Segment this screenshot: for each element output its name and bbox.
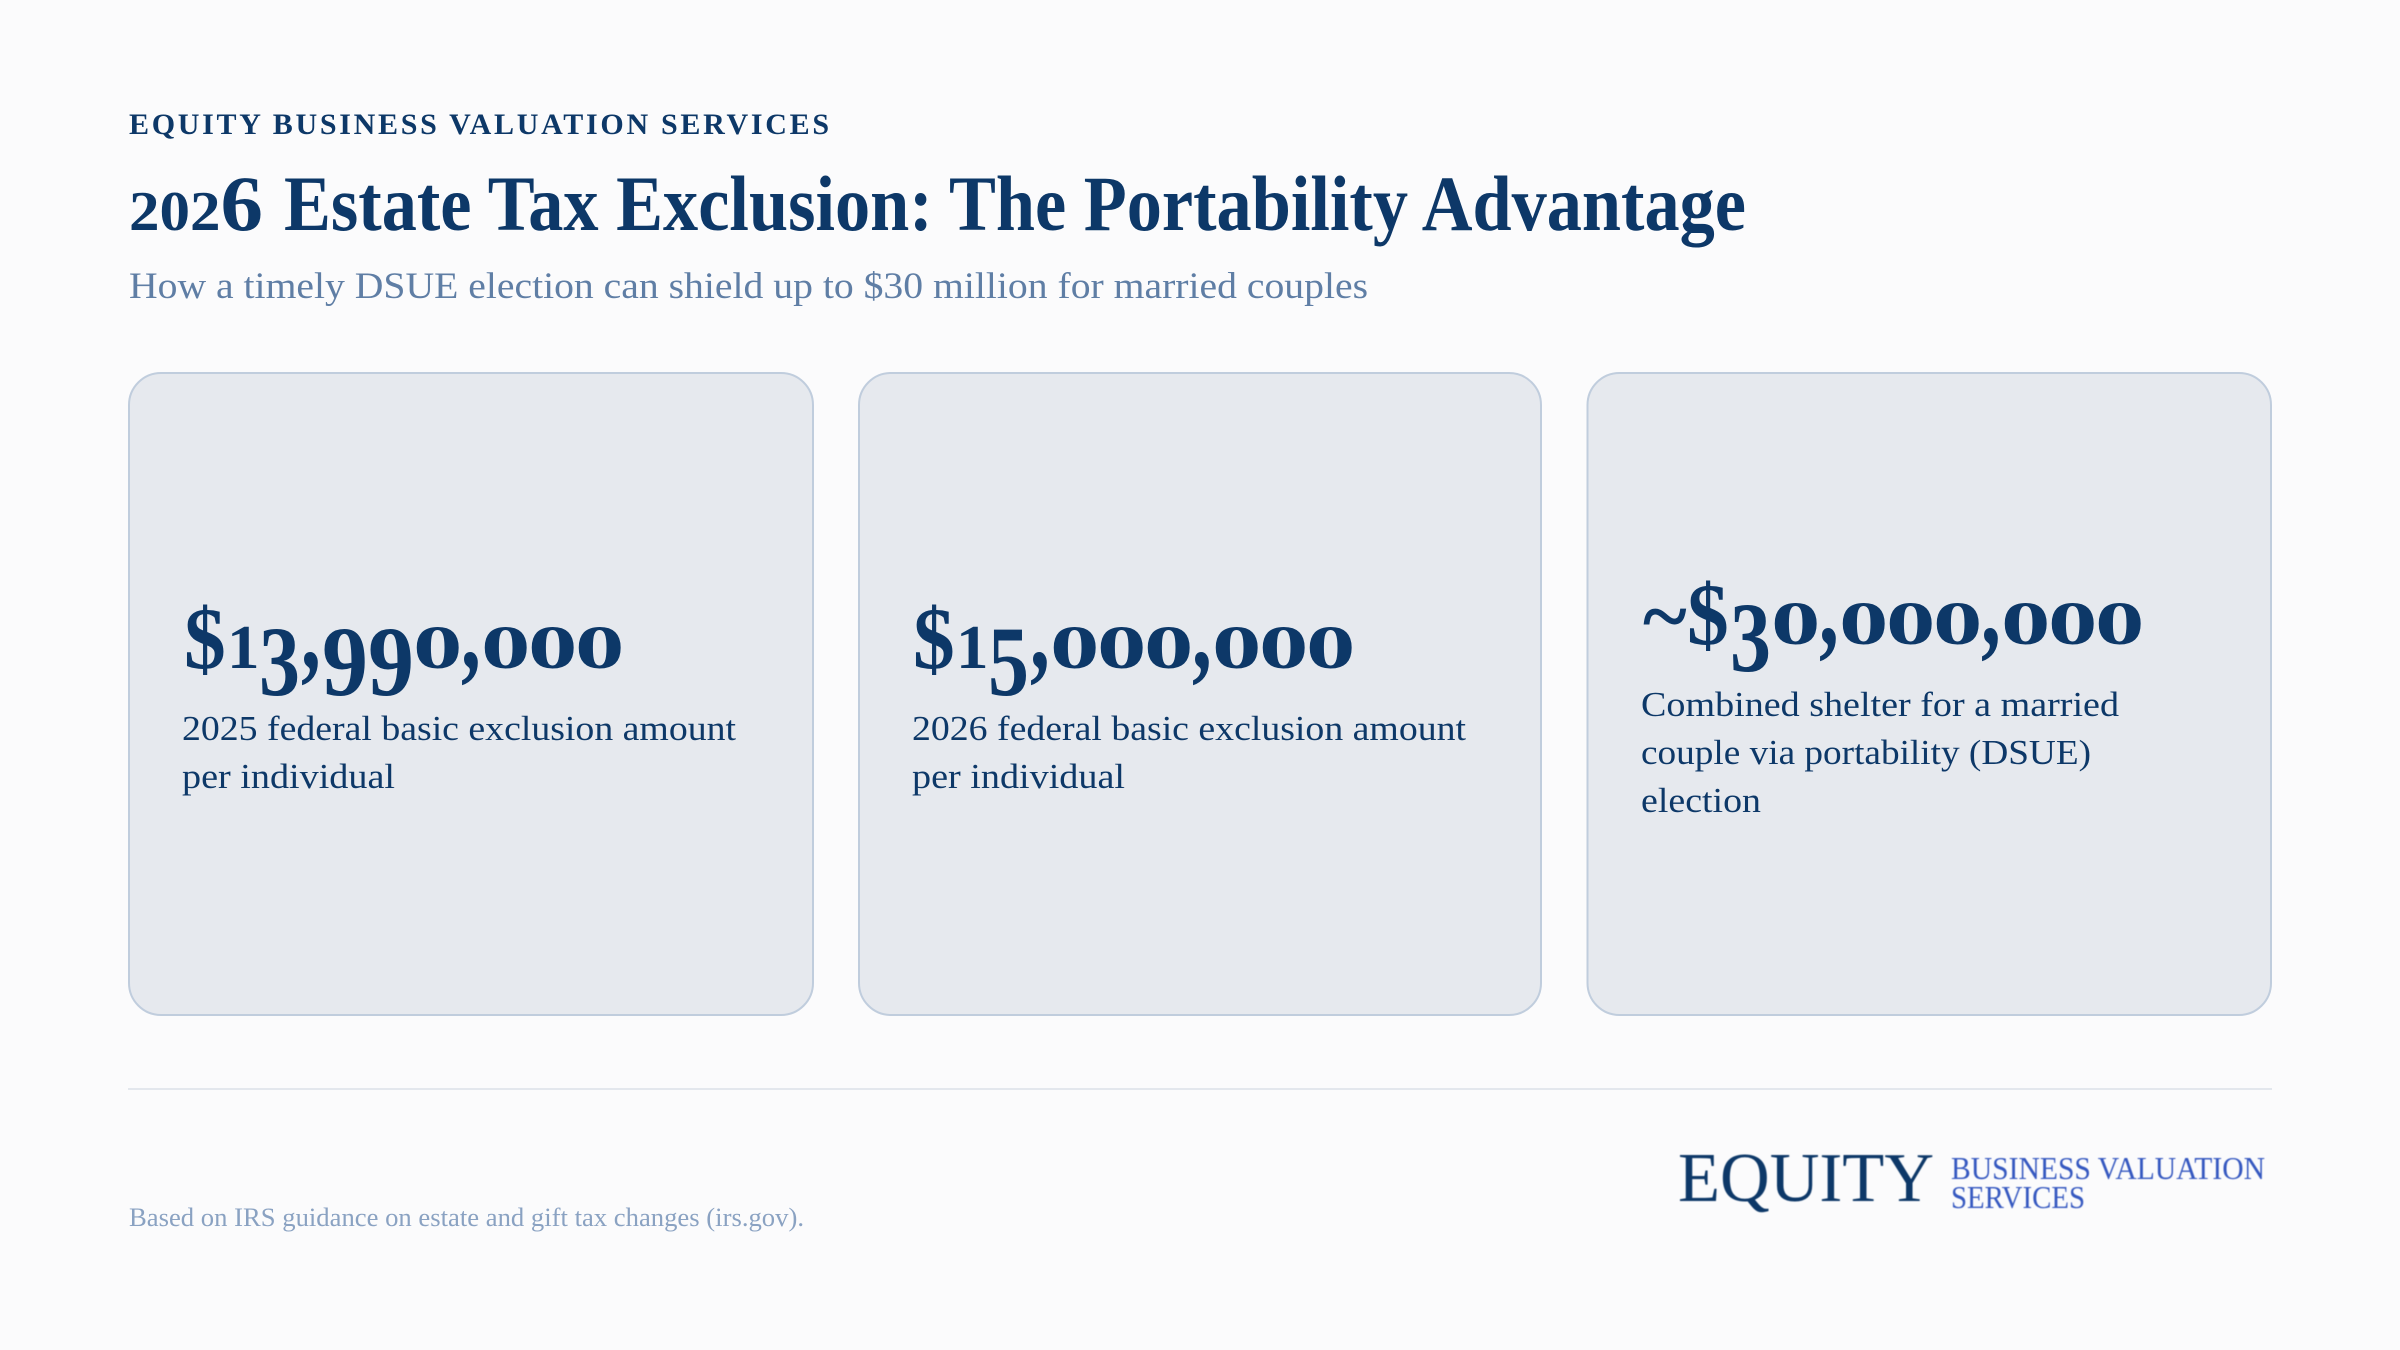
stat: $15,000,000: $ bbox=[913, 591, 955, 688]
description: 2026: 2026 federal basic exclusion amount bbox=[912, 709, 1466, 748]
logo wordmark: EQUITY bbox=[1678, 1140, 1934, 1217]
stat: $15,000,000: 0 bbox=[1097, 615, 1146, 682]
stat: $13,990,000: , bbox=[301, 570, 321, 692]
title: 2026 bbox=[129, 160, 263, 247]
stat: $13,990,000: , bbox=[461, 570, 481, 692]
stat: $15,000,000: 0 bbox=[1306, 615, 1355, 682]
description: combined bbox=[1641, 685, 2120, 820]
stat: $13,990,000: 0 bbox=[413, 615, 462, 682]
stat: ~$30,000,000: $ bbox=[1687, 567, 1729, 664]
stat: ~$30,000,000: 0 bbox=[1771, 591, 1820, 658]
stat: $15,000,000 bbox=[913, 468, 1533, 728]
source note: Based on IRS guidance on estate and gift tax changes (irs.gov). bbox=[129, 1203, 804, 1232]
logo tagline bbox=[1951, 1150, 2265, 1215]
stat: ~$30,000,000: , bbox=[1981, 546, 2001, 668]
description: 2026 bbox=[912, 709, 1466, 796]
logo bbox=[1678, 1140, 2265, 1217]
stat: $13,990,000: 3 bbox=[259, 606, 300, 717]
description: combined: couple via portability (DSUE) bbox=[1641, 733, 2091, 772]
stat: $15,000,000: 0 bbox=[1144, 615, 1193, 682]
stat: $13,990,000 bbox=[184, 468, 804, 728]
stat: $15,000,000: 0 bbox=[1212, 615, 1261, 682]
panel: 2026 exclusion bbox=[859, 373, 1541, 1015]
stat: $15,000,000: 0 bbox=[1259, 615, 1308, 682]
stat: $15,000,000: , bbox=[1030, 570, 1050, 692]
eyebrow: EQUITY BUSINESS VALUATION SERVICES bbox=[129, 108, 829, 141]
stat: ~$30,000,000 bbox=[1643, 444, 2263, 704]
stat: ~$30,000,000: 0 bbox=[1933, 591, 1982, 658]
logo tagline: SERVICES bbox=[1951, 1179, 2085, 1215]
panel: 2025 exclusion bbox=[129, 373, 813, 1015]
stat: $15,000,000: 1 bbox=[956, 614, 989, 682]
description: combined: Combined shelter for a married bbox=[1641, 685, 2120, 724]
stat: $13,990,000: 0 bbox=[528, 615, 577, 682]
stat: ~$30,000,000: 0 bbox=[2001, 591, 2050, 658]
stat: $13,990,000: 1 bbox=[227, 614, 260, 682]
stat: ~$30,000,000: 0 bbox=[1839, 591, 1888, 658]
stat: $13,990,000: 9 bbox=[322, 606, 368, 717]
stat: ~$30,000,000: , bbox=[1819, 546, 1839, 668]
stat: $15,000,000: 0 bbox=[1050, 615, 1099, 682]
stat: $13,990,000: 0 bbox=[481, 615, 530, 682]
logo tagline: BUSINESS VALUATION bbox=[1951, 1150, 2265, 1186]
stat: $13,990,000: 9 bbox=[368, 606, 414, 717]
stat: $13,990,000: 0 bbox=[575, 615, 624, 682]
description: 2026: per individual bbox=[912, 757, 1125, 796]
description: 2025: 2025 federal basic exclusion amount bbox=[182, 709, 736, 748]
stat: $15,000,000: 5 bbox=[988, 606, 1029, 717]
panel: combined shelter bbox=[1588, 373, 2271, 1015]
header block bbox=[129, 108, 1746, 307]
stat: $15,000,000: , bbox=[1192, 570, 1212, 692]
stat: ~$30,000,000: 0 bbox=[1886, 591, 1935, 658]
stat: $13,990,000: $ bbox=[184, 591, 226, 688]
title: Estate Tax Exclusion: The Portability Advantage bbox=[284, 160, 1746, 247]
description: 2025 bbox=[182, 709, 736, 796]
stat: ~$30,000,000: 3 bbox=[1730, 582, 1771, 693]
description: combined: election bbox=[1641, 781, 1761, 820]
stat: ~$30,000,000: 0 bbox=[2095, 591, 2144, 658]
subtitle: How a timely DSUE election can shield up to $30 million for married couples bbox=[129, 266, 1368, 307]
stat: ~$30,000,000: ~ bbox=[1643, 570, 1687, 663]
stat: ~$30,000,000: 0 bbox=[2048, 591, 2097, 658]
description: 2025: per individual bbox=[182, 757, 395, 796]
